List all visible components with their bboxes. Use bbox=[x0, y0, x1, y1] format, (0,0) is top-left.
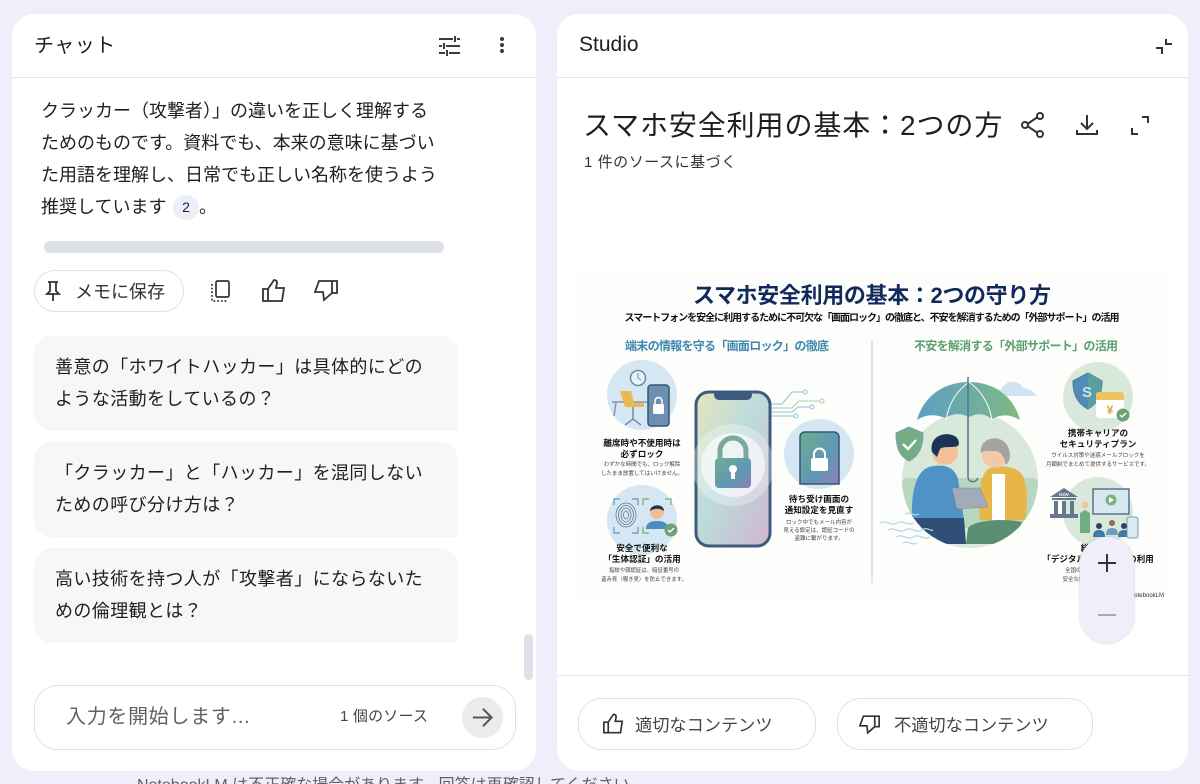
suggestion card 1: ような活動をしているの？ bbox=[55, 389, 275, 409]
icon: expand bbox=[1131, 116, 1149, 135]
icon: zoom in bbox=[1098, 554, 1116, 572]
panel: studio bbox=[557, 14, 1188, 771]
text: notification settings: 通知設定を見直す bbox=[785, 504, 854, 515]
icon: digital course circle: GOV bbox=[1059, 492, 1069, 497]
suggestion card 2: ための呼び分け方は？ bbox=[55, 495, 239, 515]
icon: thumbs down bbox=[858, 715, 880, 734]
icon: thumbs up bbox=[262, 279, 285, 302]
icon: lock screen phone circle bbox=[784, 419, 854, 489]
heads bbox=[932, 439, 958, 465]
icon: pin bbox=[44, 281, 62, 301]
citation badge: 2 bbox=[182, 199, 190, 215]
woman bbox=[979, 466, 1027, 520]
suggestion card 3: めの倫理観とは？ bbox=[55, 601, 202, 621]
icon: digital course circle bbox=[1050, 477, 1138, 547]
appropriate content button bbox=[578, 698, 816, 750]
icon: security plan circle: S bbox=[1082, 384, 1092, 401]
zoom control bbox=[1080, 537, 1134, 643]
shield bbox=[896, 427, 923, 461]
suggestion card 3: 高い技術を持つ人が「攻撃者」にならないた bbox=[55, 569, 423, 589]
chat answer text bbox=[41, 101, 437, 220]
chat answer text: ためのものです。資料でも、本来の意味に基づい bbox=[41, 133, 435, 153]
illustration: umbrella with two people bbox=[880, 377, 1040, 548]
icon: thumbs down bbox=[314, 280, 338, 302]
infographic title: スマホ安全利用の基本：2つの守り方 bbox=[693, 283, 1051, 308]
text: digital course: 全国の講習会で基本操作や bbox=[1065, 566, 1131, 574]
source count: 1 個のソース bbox=[340, 708, 428, 725]
text: notification settings: 見える設定は、認証コードの bbox=[783, 526, 855, 534]
left section heading: 端末の情報を守る「画面ロック」の徹底 bbox=[625, 338, 829, 353]
text: carrier security plan: ウイルス対策や迷惑メールブロックを bbox=[1051, 451, 1145, 459]
icon: security plan circle: ¥ bbox=[1107, 403, 1114, 417]
icon: desk lock circle bbox=[607, 360, 677, 430]
icon: security plan circle bbox=[1063, 362, 1133, 432]
suggestion card 1: 善意の「ホワイトハッカー」は具体的にどの bbox=[55, 357, 423, 377]
inappropriate content button: 不適切なコンテンツ bbox=[894, 715, 1049, 735]
text: digital course: 安全な操作方法を学べます。 bbox=[1063, 575, 1133, 583]
chat answer text: 推奨しています bbox=[41, 197, 166, 217]
text: carrier security plan: 携帯キャリアの bbox=[1068, 427, 1128, 438]
send button bbox=[462, 697, 503, 738]
text: lock when away: 離席時や不使用時は bbox=[603, 437, 681, 448]
appropriate content button: 適切なコンテンツ bbox=[635, 715, 773, 735]
text: notification settings bbox=[783, 493, 855, 542]
text: notification settings: 待ち受け画面の bbox=[789, 493, 849, 504]
waves bbox=[880, 513, 933, 544]
vertical scrollbar bbox=[524, 634, 533, 680]
text: lock when away: わずかな時間でも、ロック解除 bbox=[604, 460, 681, 468]
text: carrier security plan bbox=[1046, 427, 1150, 468]
horizontal scrollbar bbox=[44, 241, 444, 253]
citation badge bbox=[173, 195, 199, 220]
tablet bbox=[952, 488, 988, 509]
icon: zoom out bbox=[1098, 614, 1116, 616]
save to note button bbox=[34, 270, 184, 312]
icon: share bbox=[1021, 112, 1044, 138]
suggestion card 3 bbox=[34, 548, 458, 643]
text: notification settings: ロック中でもメール内容が bbox=[786, 518, 852, 526]
icon: settings sliders bbox=[439, 36, 460, 56]
chat input box: 入力を開始します... bbox=[66, 706, 250, 728]
infographic bbox=[601, 284, 1164, 597]
text: lock when away: 必ずロック bbox=[621, 448, 663, 459]
document title: スマホ安全利用の基本：2つの方 bbox=[583, 110, 1003, 141]
chat input box bbox=[34, 685, 516, 750]
text: lock when away: したまま放置してはいけません。 bbox=[601, 469, 683, 477]
text: digital course bbox=[1042, 542, 1154, 583]
right section heading: 不安を解消する「外部サポート」の活用 bbox=[914, 338, 1118, 353]
suggestion card 2 bbox=[34, 442, 458, 537]
text: lock when away bbox=[601, 437, 683, 477]
chat answer text: 。 bbox=[199, 197, 217, 217]
text: notification settings: 盗難に繋がります。 bbox=[795, 534, 843, 542]
text: biometrics: 安全で便利な bbox=[616, 542, 668, 553]
suggestion card 2: 「クラッカー」と「ハッカー」を混同しない bbox=[55, 463, 423, 483]
chat heading: チャット bbox=[34, 35, 116, 57]
cloud bbox=[990, 382, 1037, 396]
text: digital course: 総務省の bbox=[1081, 542, 1115, 553]
chat answer text: た用語を理解し、日常でも正しい名称を使うよう bbox=[41, 165, 437, 185]
infographic subtitle: スマートフォンを安全に利用するために不可欠な「画面ロック」の徹底と、不安を解消するための「外部サポート」の活用 bbox=[624, 311, 1120, 324]
watermark: NotebookLM bbox=[1130, 593, 1164, 599]
icon: copy bbox=[211, 280, 230, 302]
icon: download bbox=[1076, 115, 1098, 135]
man bbox=[912, 466, 964, 520]
central phone with lock bbox=[692, 392, 820, 546]
studio heading: Studio bbox=[579, 33, 639, 56]
panel: chat bbox=[12, 14, 536, 771]
inappropriate content button bbox=[837, 698, 1093, 750]
chat answer text: クラッカー（攻撃者）」の違いを正しく理解する bbox=[41, 101, 428, 121]
source note: 1 件のソースに基づく bbox=[584, 154, 737, 171]
infographic background bbox=[578, 270, 1166, 600]
save to note button: メモに保存 bbox=[75, 282, 165, 302]
canopy bbox=[917, 382, 1020, 420]
icon: thumbs up bbox=[603, 714, 624, 734]
suggestion card 1 bbox=[34, 336, 458, 431]
text: carrier security plan: セキュリティプラン bbox=[1060, 439, 1137, 449]
text: biometrics: 盗み見（覗き見）を防止できます。 bbox=[601, 575, 687, 583]
icon: more menu bbox=[500, 37, 504, 53]
text: biometrics bbox=[601, 542, 687, 583]
text: digital course: 「デジタル活用支援」の利用 bbox=[1042, 553, 1154, 564]
icon: biometrics circle bbox=[607, 485, 678, 555]
text: carrier security plan: 月額制でまとめて提供するサービスです。 bbox=[1046, 460, 1150, 468]
text: biometrics: 「生体認証」の活用 bbox=[603, 553, 681, 564]
icon: collapse bbox=[1156, 39, 1172, 54]
text: biometrics: 指紋や顔認証は、暗証番号の bbox=[609, 566, 679, 574]
